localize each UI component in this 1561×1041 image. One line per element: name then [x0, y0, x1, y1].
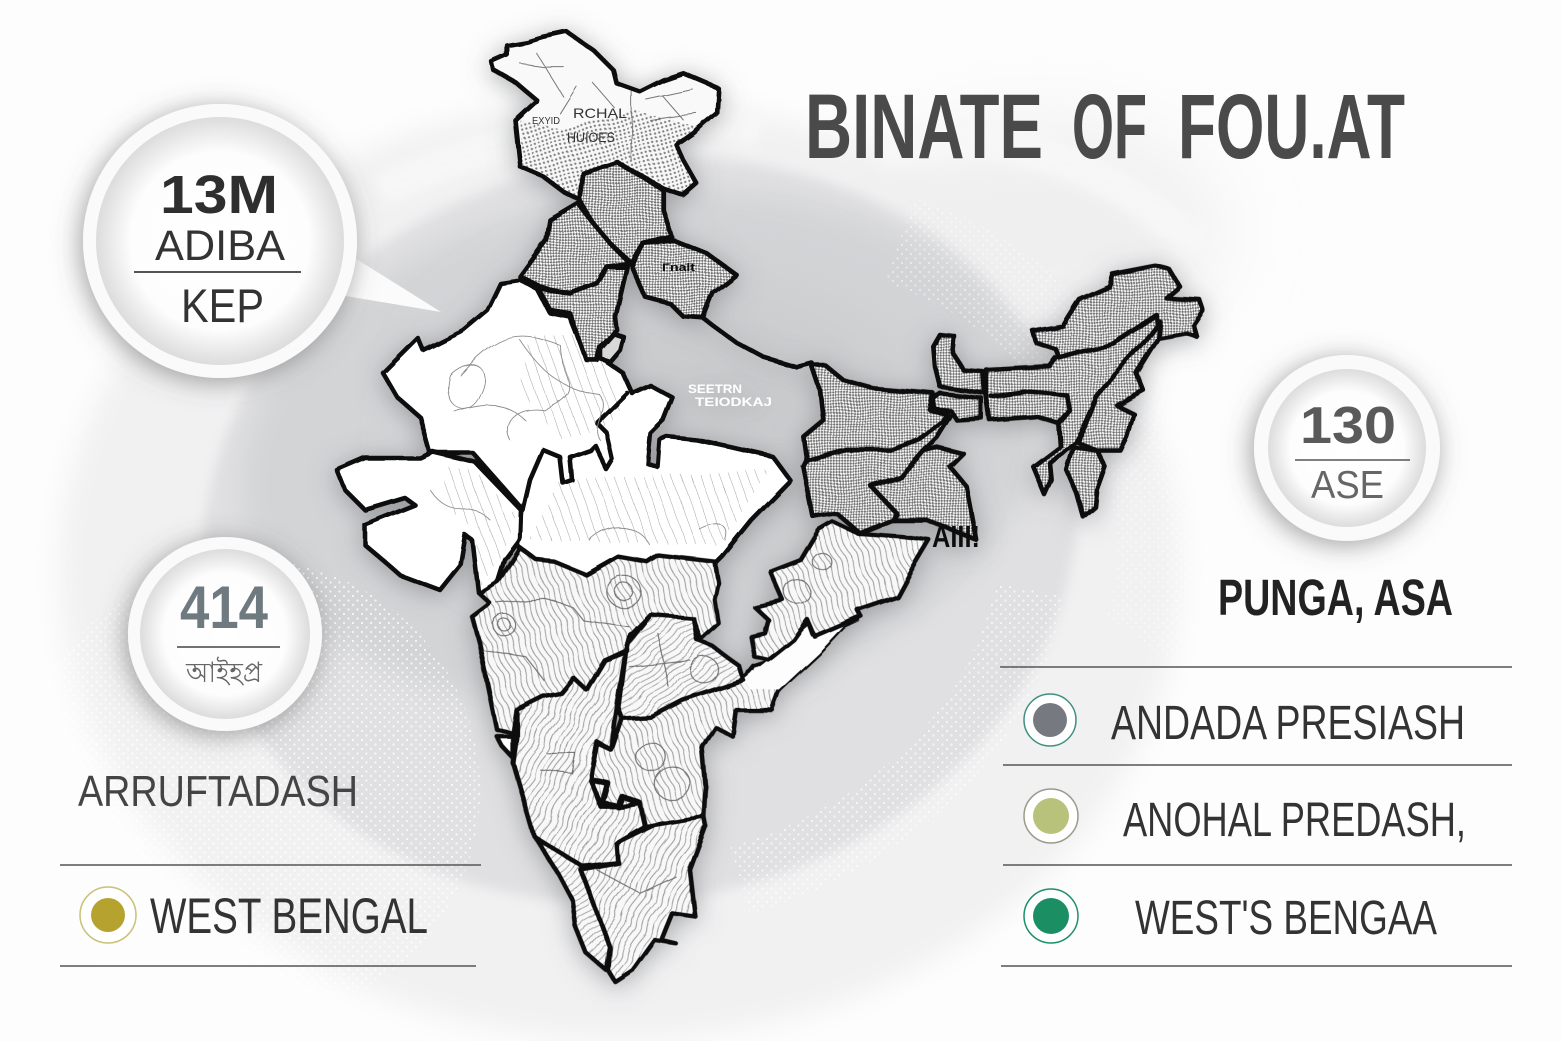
map label: aiii: AIII! [932, 519, 980, 554]
callout: 13M Adiba Kep [83, 104, 441, 378]
callout: 13M Adiba Kep: KEP [181, 279, 264, 332]
region: haryana [538, 267, 627, 360]
stat circle: 130 ASE [1254, 355, 1440, 541]
region: bihar [803, 365, 947, 460]
region: rajasthan and madhya pradesh [383, 280, 790, 575]
heading: arruftadash: ARRUFTADASH [78, 767, 358, 816]
region: sikkim hook [933, 335, 985, 393]
legend item: west's bengaa [1024, 889, 1437, 945]
region: jharkhand [803, 415, 950, 533]
region: odisha [751, 522, 929, 660]
map label: teiodkaj: TEIODKAJ [695, 395, 772, 409]
region: karnataka [513, 652, 645, 867]
region: assam [987, 315, 1160, 495]
region: arunachal pradesh [1033, 267, 1203, 358]
region: delhi [600, 333, 623, 362]
region: west bengal [872, 447, 977, 540]
legend item: west bengal left [80, 887, 428, 944]
region: gujarat [337, 452, 521, 592]
stat circle: 130 ASE: ASE [1311, 464, 1384, 507]
legend item: andada presiash [1024, 694, 1465, 750]
stat circle: 414: 414 [180, 574, 269, 641]
title [805, 76, 1405, 178]
region: mizoram [1067, 447, 1105, 517]
region: jammu and kashmir [492, 32, 718, 200]
title: BINATE [805, 76, 1043, 178]
callout: 13M Adiba Kep: 13M [160, 165, 278, 225]
stat circle: 414: আইহপ্র [185, 657, 263, 688]
title: FOU.AT [1178, 76, 1405, 178]
northern states group [492, 32, 737, 362]
map label: huioes: HUIOES [567, 129, 615, 145]
region: nagaland and manipur [1077, 322, 1160, 450]
southern states group [472, 522, 929, 982]
region: uttarakhand [632, 240, 737, 318]
india map [337, 32, 1203, 982]
region: tamil nadu [581, 817, 706, 982]
region: maharashtra [472, 548, 719, 733]
region: northern border line [703, 318, 812, 367]
region: goa [497, 737, 513, 758]
map label: seetrn: SEETRN [688, 382, 742, 396]
eastern states group [803, 267, 1203, 540]
title: OF [1072, 76, 1147, 178]
region: andhra pradesh [590, 620, 858, 827]
region: punjab [520, 203, 630, 293]
stat circle: 414 [128, 537, 322, 731]
legend item: west's bengaa: WEST'S BENGAA [1135, 892, 1437, 945]
legend item: west bengal left: WEST BENGAL [150, 888, 428, 944]
map label: rchal: RCHAL [573, 105, 627, 121]
legend rule lines [60, 667, 1512, 966]
region: himachal [580, 162, 672, 263]
callout: 13M Adiba Kep: ADIBA [155, 222, 285, 270]
region: siliguri corridor [933, 393, 982, 420]
region: kerala [535, 837, 610, 970]
heading: punga, asa: PUNGA, ASA [1218, 569, 1453, 626]
legend item: andada presiash: ANDADA PRESIASH [1111, 697, 1465, 750]
map label: rnall: Гnalt [662, 262, 695, 274]
stat circle: 130 ASE: 130 [1300, 397, 1396, 455]
map label: exyid: EXYID [532, 116, 560, 127]
region: telangana [619, 615, 744, 718]
legend item: anohal predash [1024, 789, 1466, 847]
